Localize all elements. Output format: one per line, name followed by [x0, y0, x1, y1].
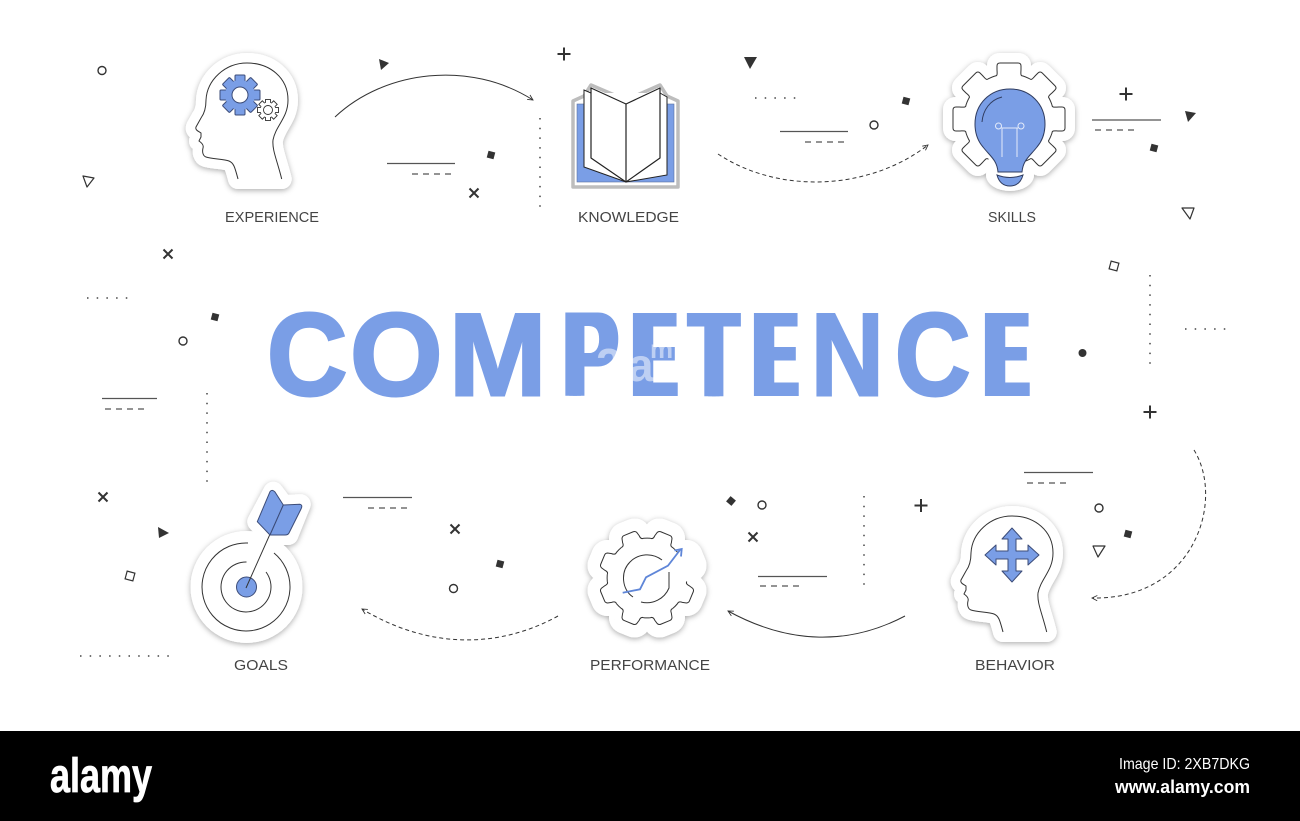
title: E [750, 286, 789, 422]
title: E [981, 286, 1020, 422]
decorative filled triangles [158, 57, 1196, 538]
label: goals: GOALS [234, 657, 288, 674]
title: E [629, 286, 668, 422]
decorative cross marks [98, 188, 758, 542]
label: performance: PERFORMANCE [590, 657, 710, 674]
decorative hollow circles [98, 66, 1103, 592]
title: O [350, 288, 443, 420]
footer website: www.alamy.com [1114, 777, 1250, 797]
decorative ruled lines [102, 120, 1161, 586]
title: P [560, 286, 614, 422]
icon: target with dart [190, 490, 302, 643]
label: experience: EXPERIENCE [225, 209, 319, 226]
arrow: skills to behavior [1092, 450, 1206, 598]
watermark over title [596, 334, 673, 391]
icon: open book [573, 85, 678, 187]
watermark over title: 2 [596, 339, 622, 391]
arrow: experience to knowledge [335, 75, 533, 117]
footer logo: alamy [50, 750, 152, 803]
decorative dotted lines [80, 98, 1227, 656]
title: C [267, 288, 347, 420]
icon: behavior head with four-way arrows [961, 516, 1053, 632]
label: skills: SKILLS [988, 209, 1036, 226]
decorative plus marks [558, 48, 1156, 512]
watermark over title: a [628, 339, 654, 391]
icon: experience head with gears [196, 63, 288, 179]
title: N [811, 288, 884, 420]
icon: light bulb in gear [953, 63, 1065, 191]
title: T [686, 286, 734, 422]
decorative hollow squares [125, 261, 1119, 581]
watermark over title: m [650, 334, 673, 364]
label: knowledge: KNOWLEDGE [578, 209, 679, 226]
label: behavior: BEHAVIOR [975, 657, 1055, 674]
decorative hollow triangles [83, 176, 1194, 557]
footer image id: Image ID: 2XB7DKG [1119, 756, 1250, 773]
icon: gear with growth arrow [584, 515, 710, 641]
arrow: knowledge to skills [718, 145, 928, 182]
arrow: behavior to performance [728, 611, 905, 637]
footer bar [0, 731, 1300, 821]
decorative filled dots and diamonds [211, 97, 1158, 568]
title: M [449, 288, 546, 420]
title [267, 286, 1030, 422]
arrow: performance to goals [362, 609, 558, 640]
title: C [895, 288, 970, 420]
